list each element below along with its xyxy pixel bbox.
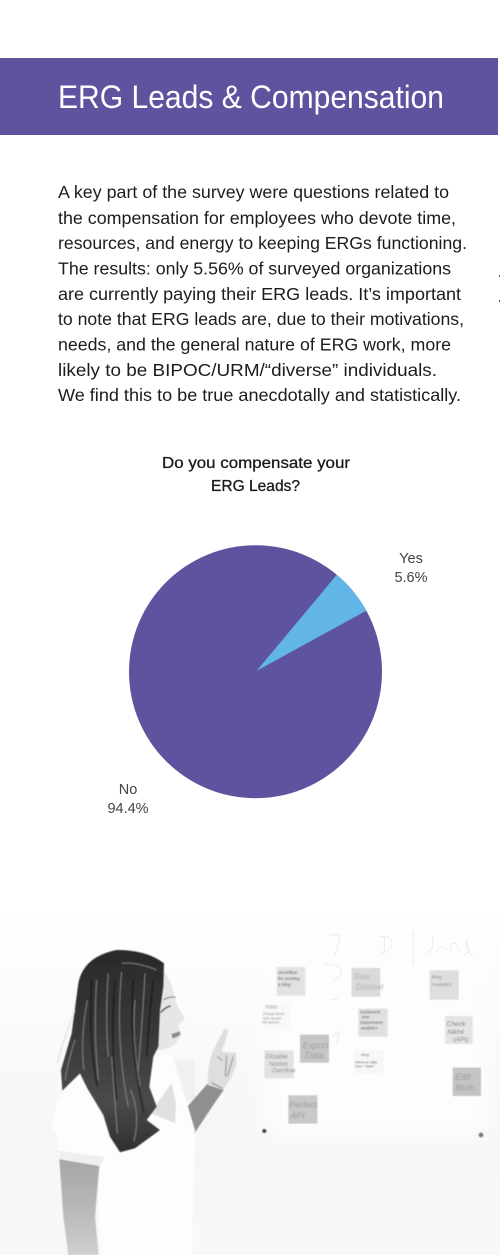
sticky notes: Blog bbox=[432, 975, 442, 981]
sticky notes: Data bbox=[305, 1051, 324, 1061]
intro paragraph: to note that ERG leads are, due to their motivations, bbox=[58, 309, 464, 329]
title banner bbox=[0, 58, 498, 135]
face bbox=[154, 972, 184, 1050]
intro paragraph: resources, and energy to keeping ERGs functioning. bbox=[58, 233, 467, 253]
shirt neckline lace bbox=[151, 1083, 176, 1123]
shirt bbox=[52, 1053, 195, 1255]
intro paragraph: are currently paying their ERG leads. It’s important bbox=[58, 284, 461, 304]
sticky notes: Raw bbox=[354, 972, 371, 981]
sleeve hem bbox=[58, 1151, 105, 1166]
sticky notes: TODO bbox=[265, 1004, 278, 1009]
label: Yes 5.6%: Yes bbox=[399, 551, 423, 567]
forearm bbox=[187, 1084, 224, 1134]
intro paragraph: We find this to be true anecdotally and statistically. bbox=[58, 385, 461, 405]
sticky notes: Dataset bbox=[356, 982, 384, 991]
label: Yes 5.6% bbox=[394, 551, 428, 586]
sticky notes: Notion bbox=[269, 1061, 289, 1068]
sticky notes: Disable bbox=[266, 1054, 288, 1061]
sticky notes: Blog bbox=[361, 1052, 370, 1057]
board headings bbox=[325, 932, 473, 1043]
sticky notes bbox=[262, 967, 481, 1124]
sticky notes: Remove data bbox=[355, 1060, 377, 1064]
hair bbox=[61, 950, 164, 1152]
pointing hand bbox=[208, 1029, 237, 1090]
sticky notes: Workflow bbox=[278, 970, 298, 975]
wispy hair edge bbox=[57, 1010, 75, 1063]
page-edge marks bbox=[499, 275, 500, 302]
sticky notes: Analytics bbox=[431, 982, 452, 988]
intro paragraph: likely to be BIPOC/URM/“diverse” individuals. bbox=[58, 360, 437, 380]
sticky notes: for posting bbox=[278, 976, 300, 981]
sticky notes: Blurb bbox=[455, 1083, 475, 1093]
board glare bbox=[263, 930, 490, 1137]
sticky notes: API bbox=[290, 1111, 305, 1121]
label: No 94.4%: 94.4% bbox=[107, 801, 149, 817]
sticky notes: Change theme bbox=[263, 1012, 285, 1016]
intro paragraph: the compensation for employees who devote time, bbox=[58, 208, 456, 228]
intro paragraph: A key part of the survey were questions related to bbox=[58, 182, 449, 202]
sticky notes: Export bbox=[303, 1040, 329, 1050]
sticky notes: analytics bbox=[361, 1025, 378, 1030]
chart heading: Do you compensate your bbox=[162, 455, 351, 472]
sticky notes: Edit bbox=[455, 1072, 471, 1082]
sticky notes: the buttons bbox=[263, 1021, 279, 1025]
light switch bbox=[173, 1059, 195, 1101]
whiteboard with sticky notes bbox=[262, 930, 490, 1137]
sticky notes: Perfect bbox=[289, 1099, 317, 1109]
label: Yes 5.6%: 5.6% bbox=[394, 570, 428, 586]
title: ERG Leads & Compensation bbox=[58, 79, 444, 115]
chart heading bbox=[162, 455, 351, 495]
sticky notes: new bbox=[361, 1015, 370, 1020]
sticky notes: color around bbox=[263, 1016, 281, 1020]
pie chart bbox=[129, 545, 382, 798]
near arm bbox=[59, 1159, 99, 1255]
intro paragraph: needs, and the general nature of ERG work, more bbox=[58, 334, 451, 354]
photo: woman pointing at a sticky-note board bbox=[0, 905, 500, 1255]
sticky notes: from "Stats" bbox=[355, 1065, 375, 1069]
intro paragraph: The results: only 5.56% of surveyed organizations bbox=[58, 258, 451, 278]
sticky notes: (API) bbox=[453, 1037, 468, 1044]
board mounts bbox=[262, 1129, 483, 1137]
slice: No 94.4% bbox=[129, 545, 382, 798]
sticky notes: Department bbox=[360, 1020, 383, 1025]
hair highlights bbox=[65, 963, 157, 1142]
woman figure bbox=[52, 950, 237, 1255]
label: No 94.4%: No bbox=[119, 782, 137, 798]
sticky notes: Implement bbox=[360, 1009, 381, 1014]
sticky notes: Nikhil bbox=[447, 1029, 464, 1036]
intro paragraph bbox=[58, 182, 467, 405]
slice: Yes 5.6% bbox=[257, 575, 366, 671]
chart heading: ERG Leads? bbox=[211, 478, 300, 495]
sticky notes: a blog bbox=[278, 982, 291, 987]
label: No 94.4% bbox=[107, 782, 149, 817]
sticky notes: Check bbox=[447, 1021, 466, 1028]
sticky notes: Overflow bbox=[272, 1069, 296, 1075]
